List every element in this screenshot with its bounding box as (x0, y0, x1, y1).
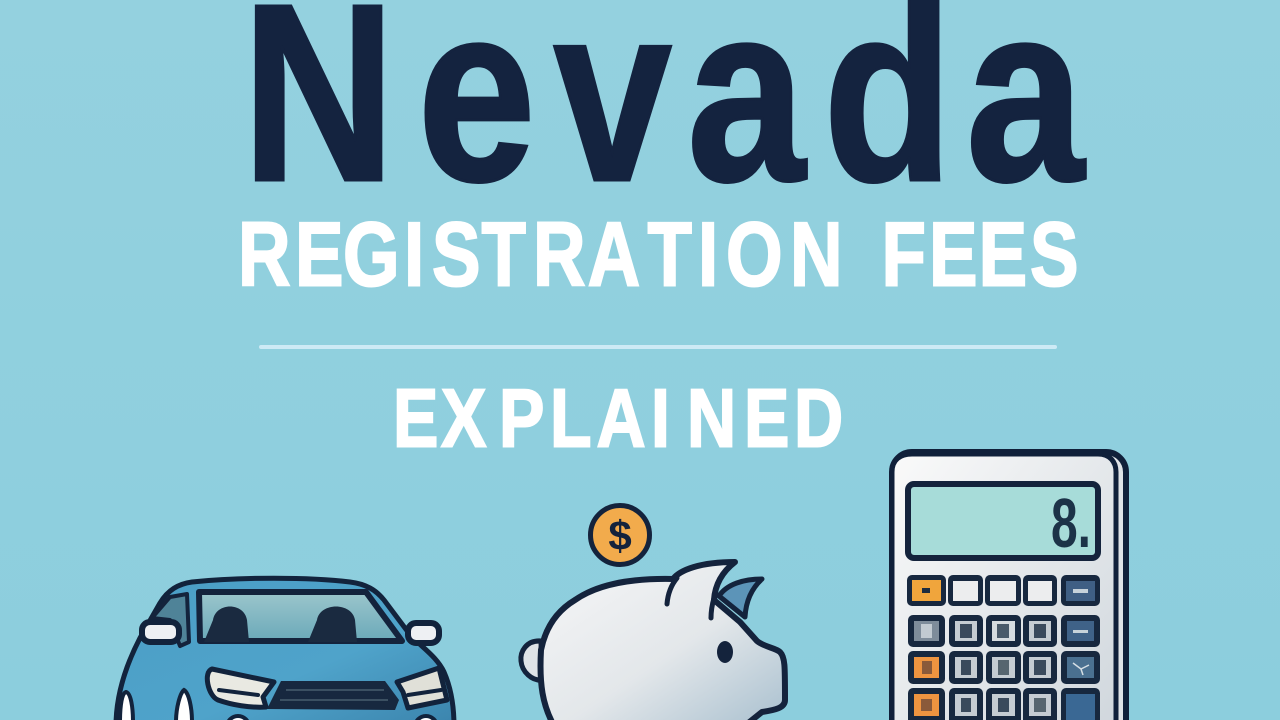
calculator face (892, 454, 1116, 720)
side window (152, 594, 189, 646)
body (540, 562, 785, 720)
icon: dollar coin (590, 506, 650, 564)
heading: Explained: EXPLAINED (393, 372, 843, 465)
keypad row 4 (908, 688, 1100, 720)
tail (521, 641, 542, 680)
display (908, 484, 1098, 562)
display: 8. (1051, 484, 1091, 562)
left mirror (142, 622, 179, 642)
windshield (199, 592, 402, 641)
eye (717, 641, 733, 663)
front details (120, 690, 437, 720)
icon: car (116, 578, 454, 720)
divider line (259, 345, 1057, 349)
left headlight (207, 669, 274, 707)
icon: piggy bank (521, 562, 785, 720)
right mirror (408, 623, 439, 643)
keypad row 1 (907, 575, 1100, 606)
keypad row 2 (908, 615, 1100, 647)
back ear (719, 579, 762, 617)
calculator back edge (892, 452, 1126, 720)
icon: calculator (892, 452, 1126, 720)
keypad row 3 (908, 651, 1100, 684)
ear creases (667, 578, 714, 618)
grille (267, 681, 399, 710)
right headlight (397, 668, 447, 708)
seats (204, 606, 357, 642)
subtitle: Registration Fees: REGISTRATION FEES (238, 204, 1079, 305)
icon: dollar coin: $ (608, 512, 632, 559)
